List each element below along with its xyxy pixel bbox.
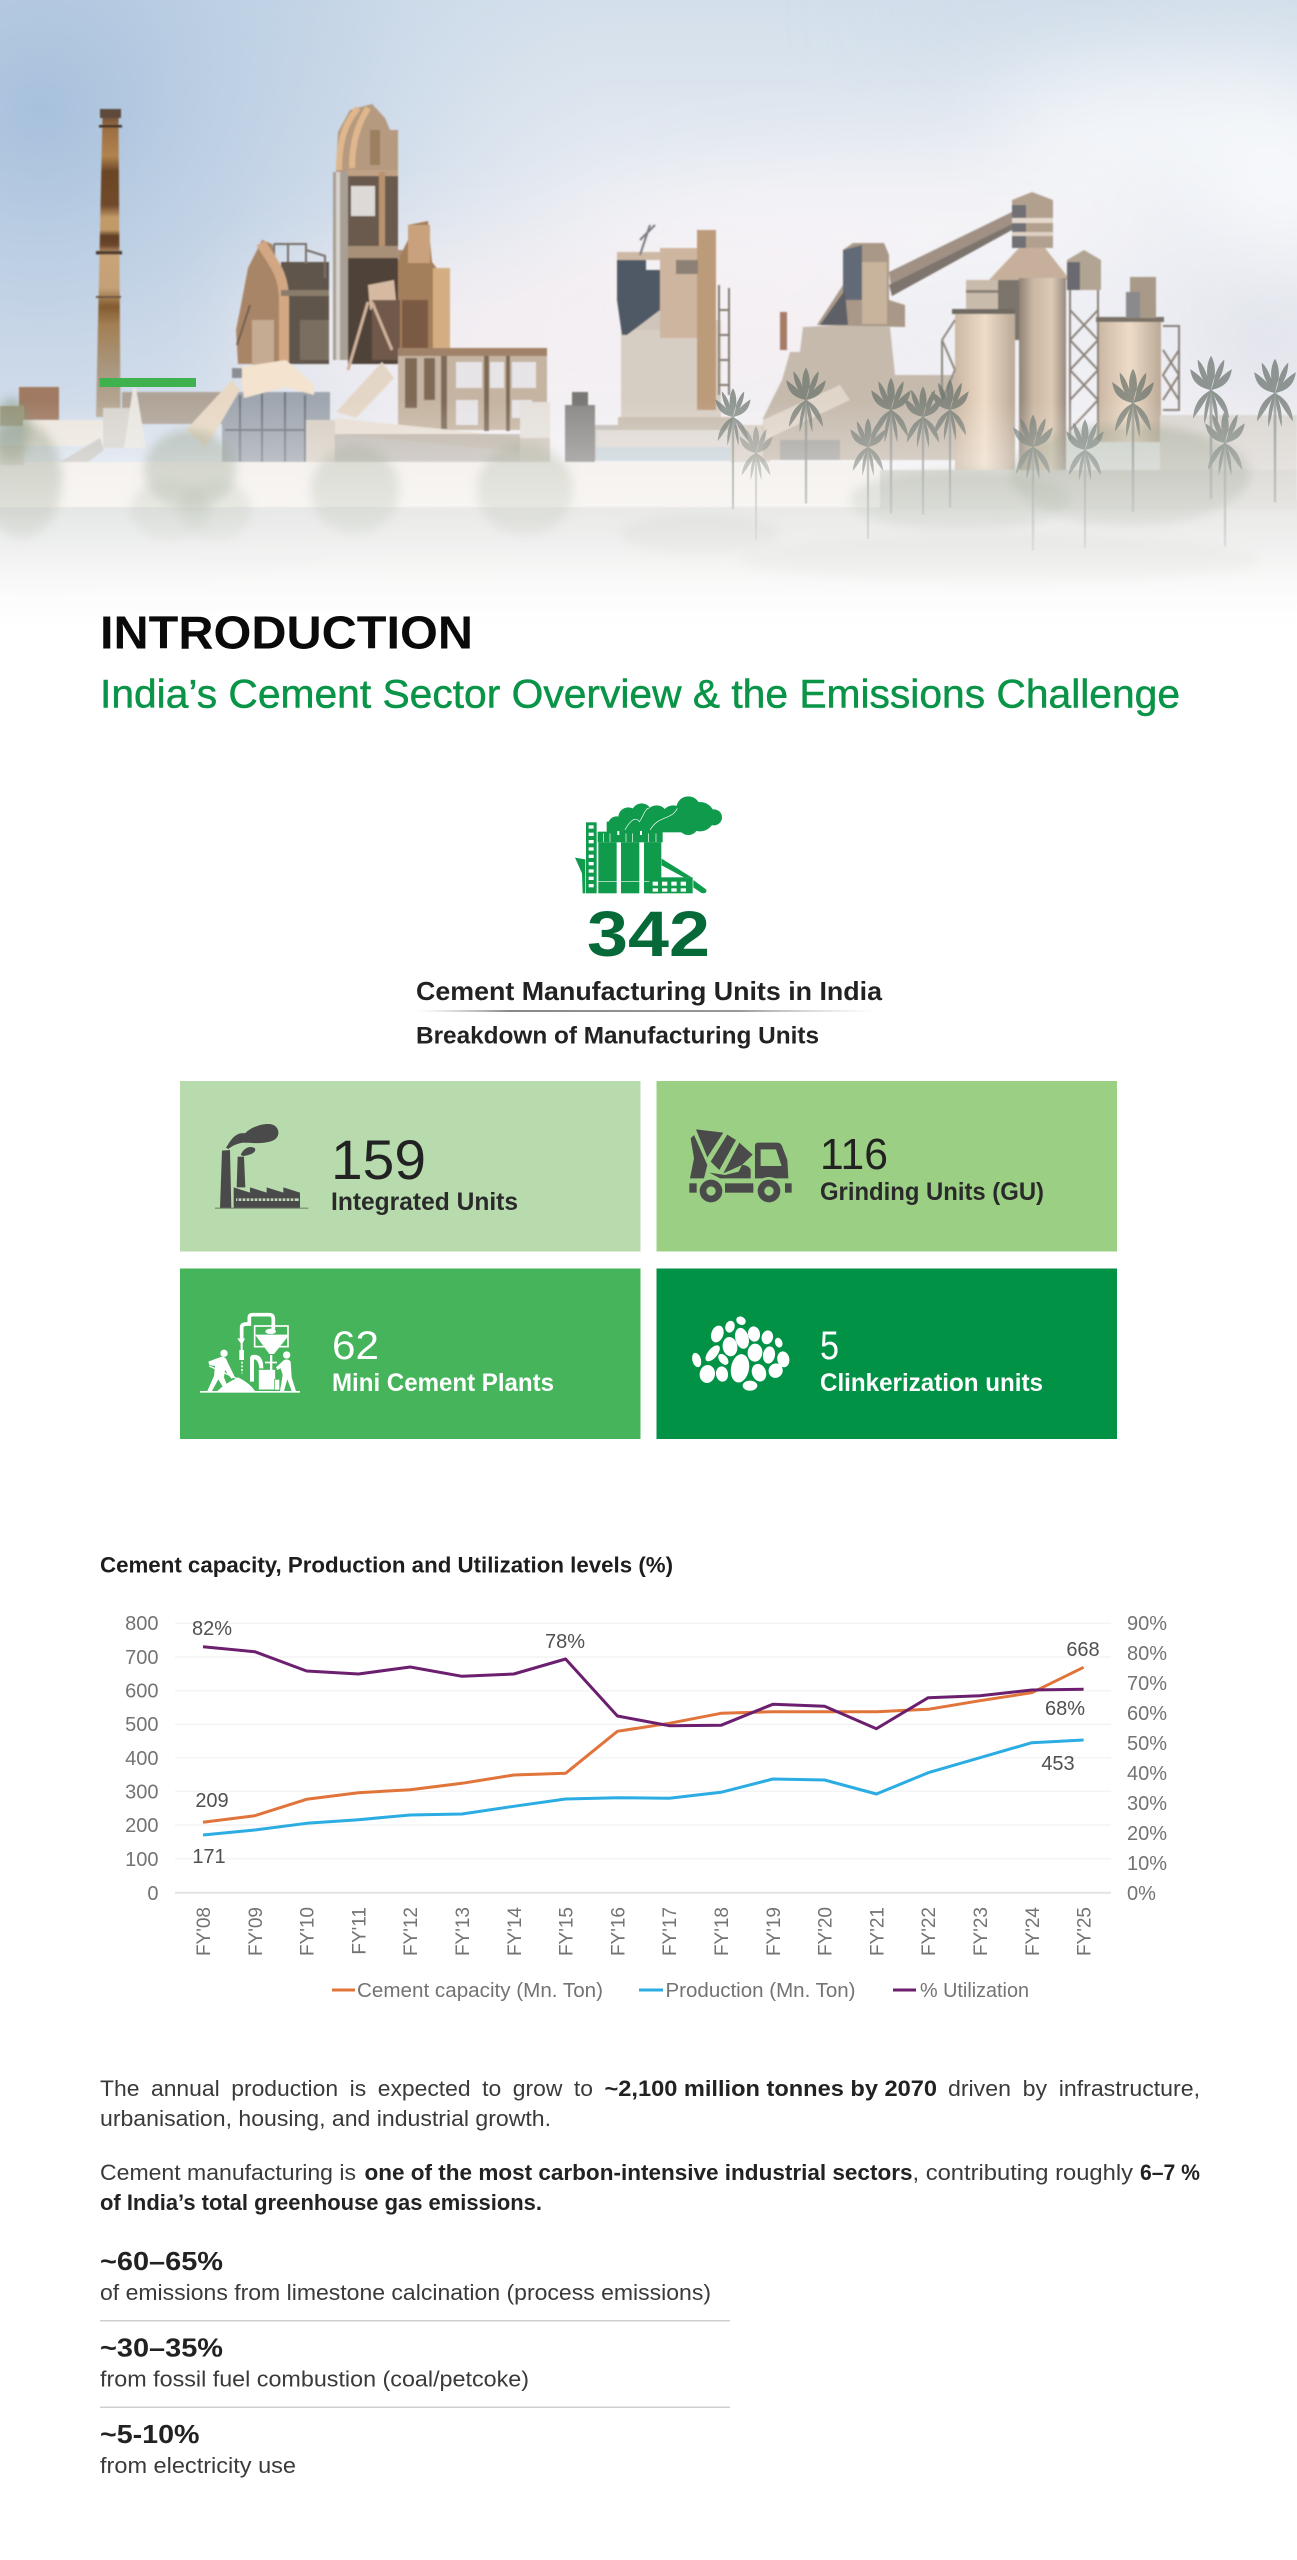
left axis labels: 200 xyxy=(125,1815,158,1837)
x axis labels: FY'12 xyxy=(401,1907,422,1956)
x axis labels: FY'13 xyxy=(453,1907,474,1956)
stat: electricity use: from electricity use xyxy=(100,2453,296,2478)
x axis labels: FY'22 xyxy=(919,1907,940,1956)
centre tower xyxy=(621,320,721,420)
heading: introduction: INTRODUCTION xyxy=(100,606,473,658)
right axis labels: 10% xyxy=(1127,1853,1167,1875)
left axis labels: 500 xyxy=(125,1714,158,1736)
paragraph: emissions share: of India’s total greenhouse gas emissions. xyxy=(100,2190,542,2215)
x axis labels: FY'20 xyxy=(816,1907,837,1956)
data labels: 78% xyxy=(545,1631,585,1653)
icon: clinker pile xyxy=(691,1315,791,1391)
right axis labels: 50% xyxy=(1127,1733,1167,1755)
stat: process emissions: of emissions from limestone calcination (process emissions) xyxy=(100,2280,711,2305)
stat: electricity use: ~5-10% xyxy=(100,2419,200,2449)
x axis labels: FY'10 xyxy=(298,1907,319,1956)
kiln side unit xyxy=(281,262,329,364)
label integrated units: Integrated Units xyxy=(331,1188,518,1216)
series: cement capacity xyxy=(203,1667,1084,1822)
label clinkerization units: Clinkerization units xyxy=(820,1369,1043,1397)
data labels: 68% xyxy=(1045,1698,1085,1720)
mid small unit xyxy=(565,405,595,465)
value 116: 116 xyxy=(820,1130,888,1179)
left axis labels: 100 xyxy=(125,1849,158,1871)
data labels: 82% xyxy=(192,1618,232,1640)
x axis labels: FY'16 xyxy=(608,1907,629,1956)
right axis labels: 70% xyxy=(1127,1673,1167,1695)
x axis labels: FY'17 xyxy=(660,1907,681,1956)
left axis labels: 300 xyxy=(125,1782,158,1804)
value 5: 5 xyxy=(820,1324,839,1368)
legend xyxy=(332,1980,1029,2002)
data labels: 453 xyxy=(1041,1753,1075,1775)
data labels: 668 xyxy=(1066,1639,1100,1661)
green accent bar xyxy=(100,378,196,387)
stat: electricity use xyxy=(100,2419,296,2478)
stat: process emissions xyxy=(100,2246,711,2305)
caption: cement manufacturing units: Cement Manufacturing Units in India xyxy=(416,976,883,1006)
panel: clinkerization units xyxy=(656,1268,1117,1439)
paragraph: emissions share: 6–7 % xyxy=(1140,2160,1200,2185)
left axis labels: 800 xyxy=(125,1613,158,1635)
icon: factory xyxy=(215,1124,308,1209)
icon: cement mixer truck xyxy=(689,1129,792,1205)
x axis labels: FY'14 xyxy=(505,1907,526,1956)
right axis labels: 40% xyxy=(1127,1763,1167,1785)
paragraph: production outlook: driven by infrastructure, xyxy=(948,2076,1200,2101)
panel: mini cement plants xyxy=(180,1268,640,1439)
right axis labels: 0% xyxy=(1127,1883,1156,1905)
right axis labels: 90% xyxy=(1127,1613,1167,1635)
stat: fossil fuel combustion: from fossil fuel combustion (coal/petcoke) xyxy=(100,2366,529,2392)
right axis labels xyxy=(1127,1613,1167,1905)
total count: 342 xyxy=(587,898,710,970)
silos xyxy=(989,248,1067,280)
stat: fossil fuel combustion: ~30–35% xyxy=(100,2332,223,2362)
boundary wall xyxy=(0,462,880,507)
hero photo: cement plant skyline xyxy=(0,0,1297,645)
legend: Cement capacity (Mn. Ton) xyxy=(357,1980,603,2002)
left plant xyxy=(19,387,59,421)
value 159: 159 xyxy=(331,1128,426,1191)
caption: breakdown: Breakdown of Manufacturing Units xyxy=(416,1022,819,1050)
paragraph: production outlook: The annual production is expected to grow to xyxy=(100,2076,593,2101)
series: production xyxy=(203,1740,1084,1835)
series: utilization xyxy=(203,1647,1084,1729)
frame building xyxy=(398,350,547,430)
right axis labels: 80% xyxy=(1127,1643,1167,1665)
x axis labels: FY'23 xyxy=(971,1907,992,1956)
line chart: capacity, production, utilization xyxy=(125,1613,1167,2002)
legend: % Utilization xyxy=(920,1980,1029,2002)
paragraph: emissions share: one of the most carbon-intensive industrial sectors xyxy=(364,2160,912,2185)
data labels: 171 xyxy=(192,1846,226,1868)
paragraph: emissions share: , contributing roughly xyxy=(912,2160,1133,2185)
stat: process emissions: ~60–65% xyxy=(100,2246,223,2276)
blue-gray shed xyxy=(222,392,330,464)
x axis labels: FY'08 xyxy=(194,1907,215,1956)
left axis labels: 600 xyxy=(125,1680,158,1702)
x axis labels: FY'18 xyxy=(712,1907,733,1956)
icon: workers at plant xyxy=(200,1315,300,1393)
left axis labels xyxy=(125,1613,158,1905)
x axis labels: FY'19 xyxy=(764,1907,785,1956)
x axis labels: FY'11 xyxy=(349,1907,370,1955)
paragraph: production outlook: ~2,100 million tonnes by 2070 xyxy=(604,2076,937,2101)
subtitle: India’s Cement Sector Overview & the Emissions Challenge xyxy=(100,672,1180,716)
x axis labels xyxy=(194,1907,1096,1956)
paragraph: emissions share: Cement manufacturing is xyxy=(100,2160,356,2185)
paragraph: emissions share xyxy=(100,2160,1200,2215)
icon: green cement plant with smoke xyxy=(575,796,722,894)
stat: fossil fuel combustion xyxy=(100,2332,529,2392)
label mini cement plants: Mini Cement Plants xyxy=(332,1369,554,1397)
right axis labels: 20% xyxy=(1127,1823,1167,1845)
left axis labels: 400 xyxy=(125,1748,158,1770)
paragraph: production outlook xyxy=(100,2076,1200,2131)
trees and palms xyxy=(0,398,1260,585)
main preheater tower xyxy=(336,104,398,260)
x axis labels: FY'25 xyxy=(1075,1907,1096,1956)
data labels: 209 xyxy=(195,1790,229,1812)
data labels xyxy=(192,1618,1100,1868)
right axis labels: 60% xyxy=(1127,1703,1167,1725)
legend: Production (Mn. Ton) xyxy=(666,1980,856,2002)
left axis labels: 700 xyxy=(125,1647,158,1669)
panel: grinding units xyxy=(656,1081,1117,1252)
panel: integrated units xyxy=(180,1081,640,1252)
left axis labels: 0 xyxy=(147,1883,158,1905)
x axis labels: FY'24 xyxy=(1023,1907,1044,1956)
paragraph: production outlook: urbanisation, housing, and industrial growth. xyxy=(100,2106,551,2131)
chart title: Cement capacity, Production and Utilization levels (%) xyxy=(100,1552,673,1578)
right axis labels: 30% xyxy=(1127,1793,1167,1815)
label grinding units: Grinding Units (GU) xyxy=(820,1178,1044,1206)
x axis labels: FY'09 xyxy=(246,1907,267,1956)
x axis labels: FY'15 xyxy=(557,1907,578,1956)
x axis labels: FY'21 xyxy=(867,1907,888,1956)
value 62: 62 xyxy=(332,1324,379,1368)
mid right complex xyxy=(763,325,955,460)
conveyors xyxy=(186,380,240,448)
